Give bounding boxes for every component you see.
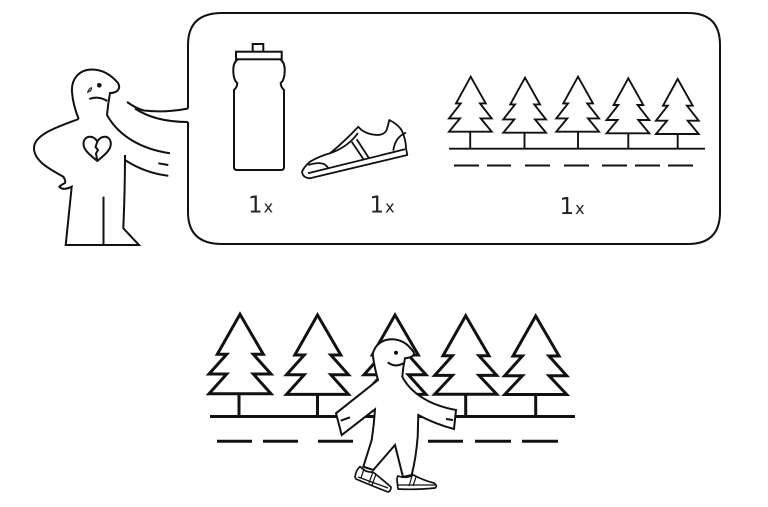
small tree 3 bbox=[556, 77, 599, 149]
large tree 1 bbox=[209, 314, 271, 416]
large tree 3 bbox=[364, 315, 426, 394]
icon: water bottle bbox=[233, 44, 285, 170]
person: sad figure with broken heart bbox=[34, 70, 170, 245]
label: forest quantity: 1x bbox=[560, 194, 585, 220]
tear bbox=[88, 88, 92, 92]
body outline bbox=[34, 70, 170, 245]
small path dashes bbox=[454, 164, 693, 166]
walker smile bbox=[388, 362, 403, 365]
large ground line bbox=[210, 415, 575, 418]
walker left shoe bbox=[355, 466, 391, 492]
quantity labels bbox=[248, 192, 585, 220]
walker eye bbox=[394, 351, 398, 355]
small tree 4 bbox=[607, 78, 649, 149]
large forest path scene bbox=[209, 314, 575, 441]
walker right shoe bbox=[397, 475, 436, 489]
leg divider bbox=[102, 197, 104, 245]
label: bottle quantity: 1x bbox=[248, 192, 273, 218]
small forest path scene bbox=[449, 77, 705, 166]
icon: sneaker bbox=[302, 120, 407, 178]
small tree 1 bbox=[449, 77, 492, 149]
small tree 2 bbox=[503, 78, 546, 149]
large path dashes bbox=[217, 440, 558, 443]
large tree 4 bbox=[435, 316, 497, 417]
sleeve mark bbox=[158, 163, 168, 165]
large tree 5 bbox=[505, 316, 567, 416]
small ground line bbox=[449, 148, 705, 150]
label: shoe quantity: 1x bbox=[370, 192, 395, 218]
walker body bbox=[336, 339, 456, 477]
broken heart bbox=[84, 137, 111, 161]
sad mouth bbox=[89, 98, 107, 101]
small tree 5 bbox=[656, 79, 699, 149]
walker cuff marks bbox=[341, 417, 453, 421]
speech bubble panel bbox=[127, 13, 720, 244]
person: walking figure bbox=[336, 339, 456, 492]
large tree 2 bbox=[286, 315, 348, 416]
eye bbox=[97, 83, 102, 88]
